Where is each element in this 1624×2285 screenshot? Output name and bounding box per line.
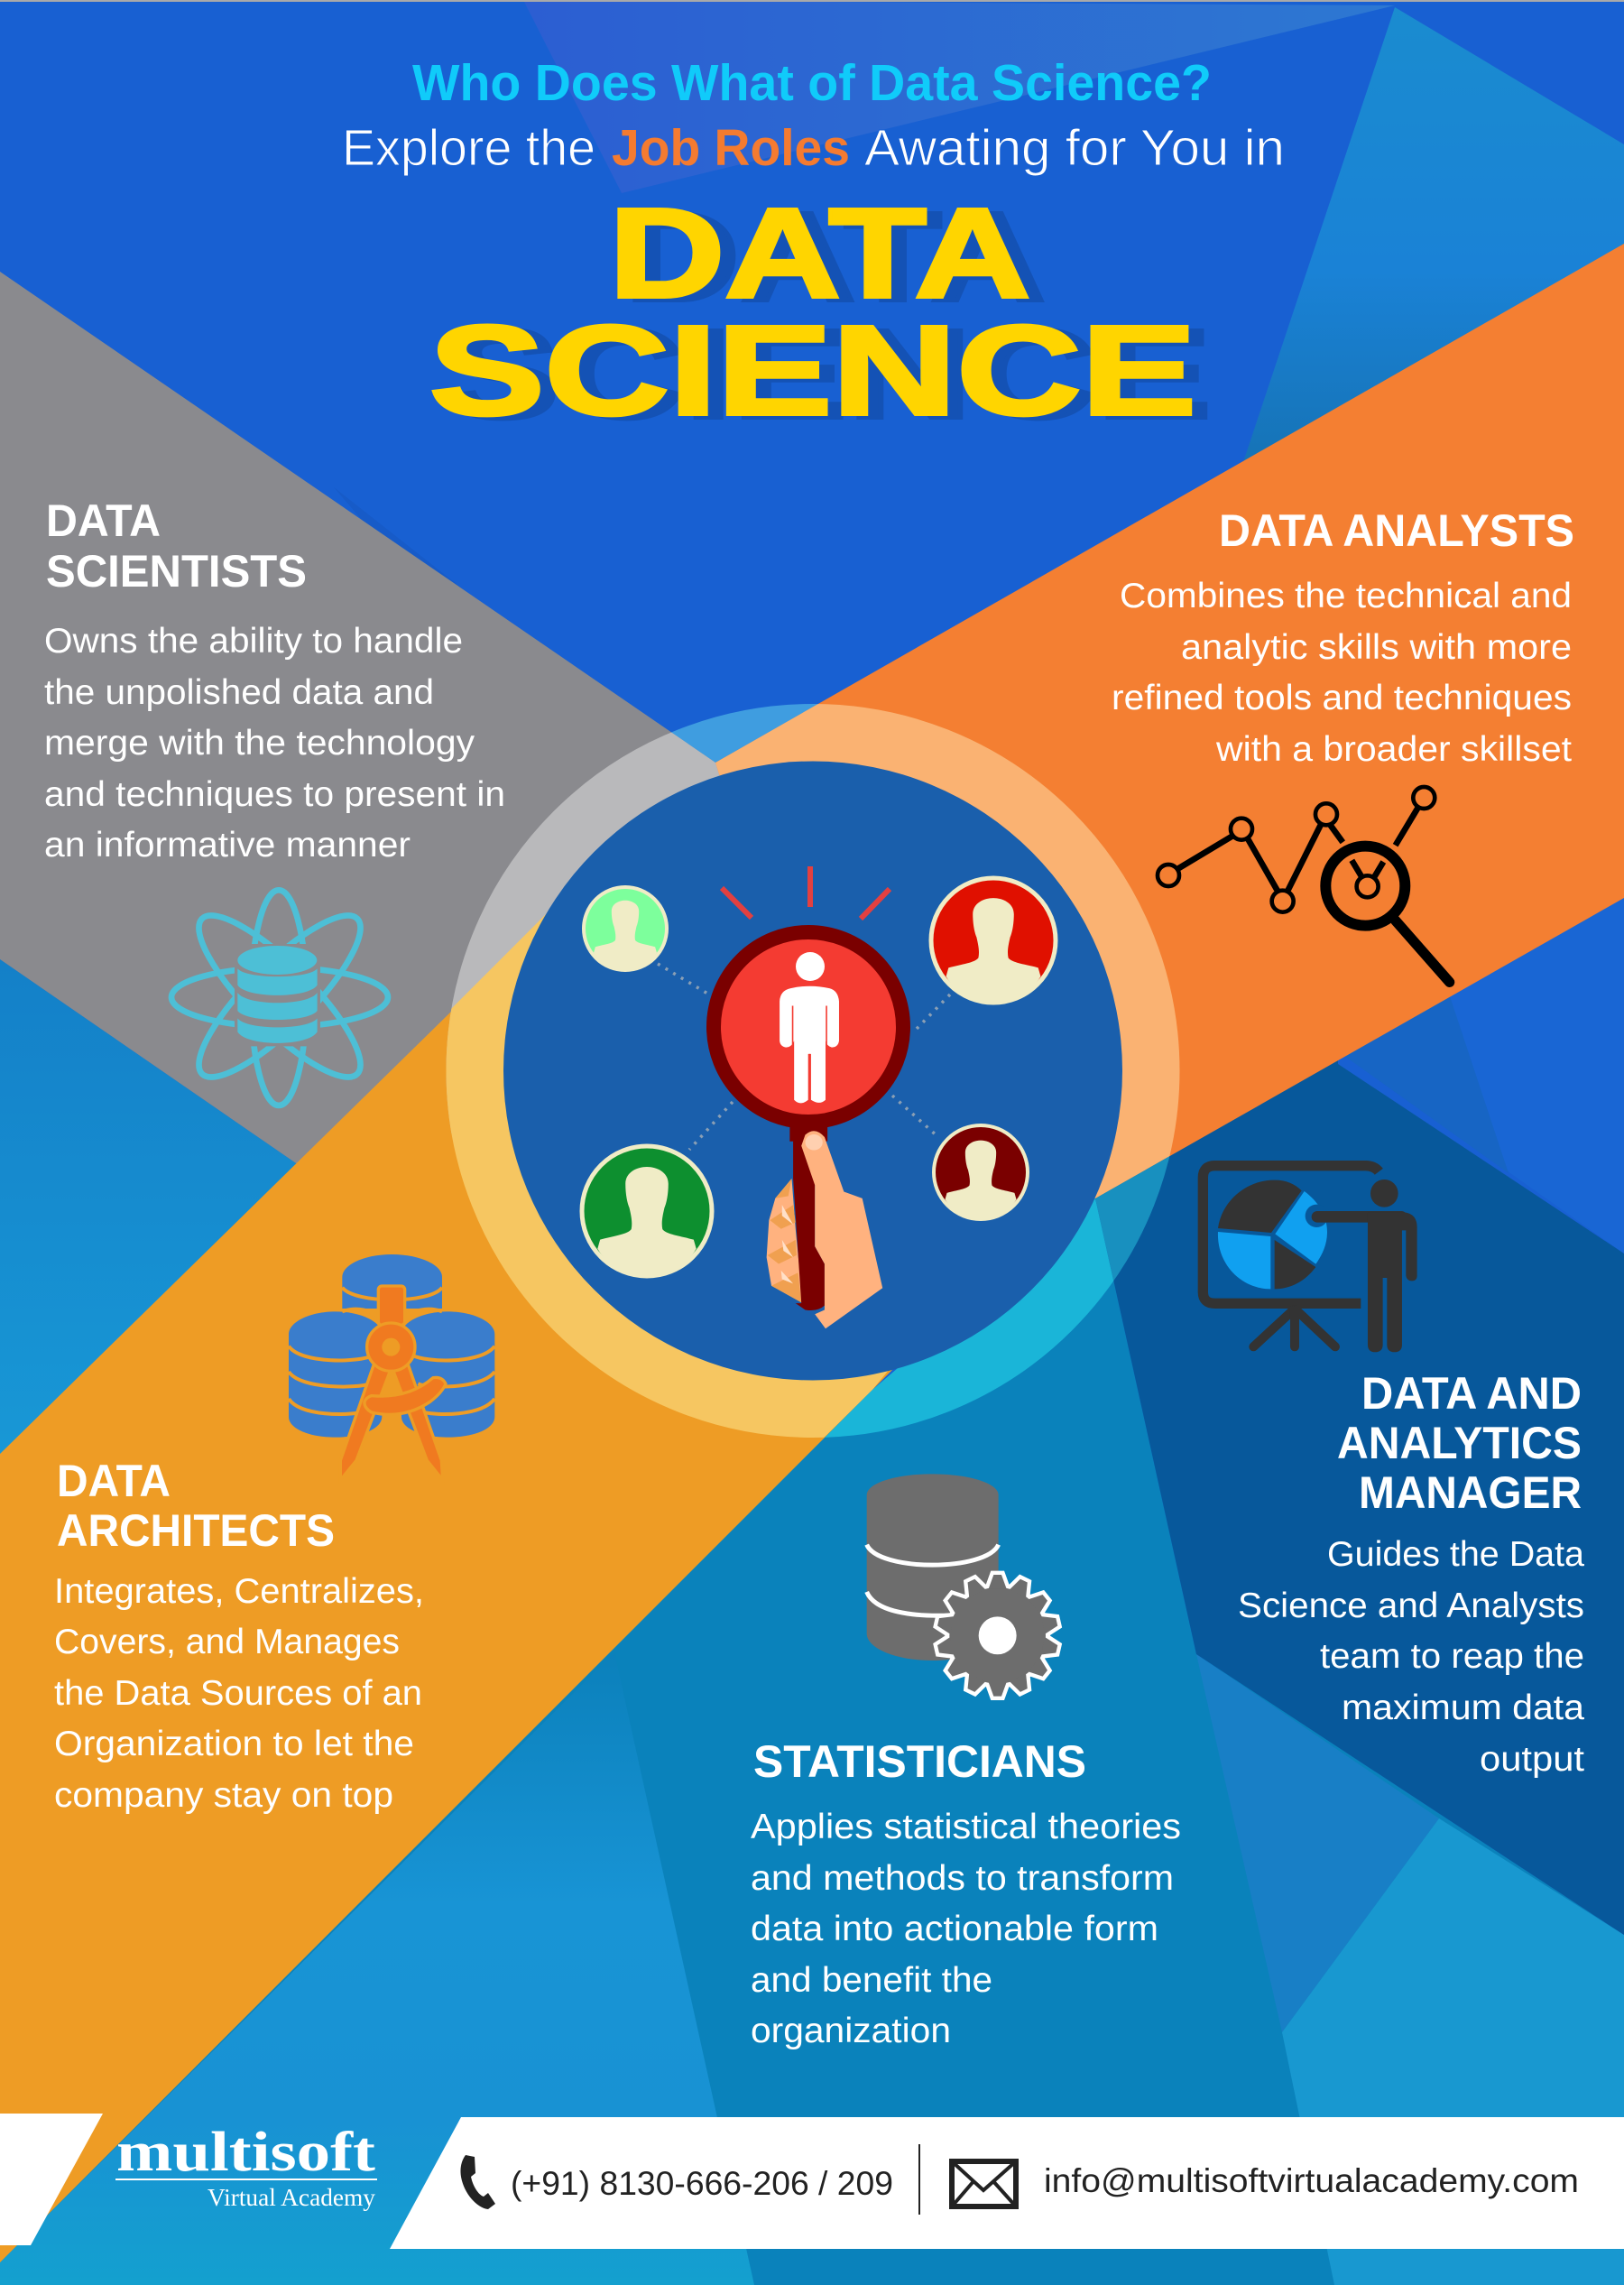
icon: atom with database: [171, 890, 388, 1105]
description: [44, 622, 505, 865]
central ring: [475, 733, 1151, 1409]
icon: white person: [780, 952, 839, 1103]
heading: DATA ANALYSTS: [1219, 505, 1574, 556]
heading: MANAGER: [1359, 1467, 1582, 1518]
description: maximum data: [1342, 1688, 1584, 1727]
panel: data architects background: [0, 835, 992, 2262]
icon: phone: [460, 2155, 495, 2209]
panel: data and analytics manager background: [1092, 1047, 1624, 1935]
text block: data scientists: [44, 495, 505, 865]
icon: green person: [582, 1146, 712, 1276]
heading: ARCHITECTS: [57, 1505, 335, 1556]
highlight rays: [722, 866, 890, 919]
description: data into actionable form: [751, 1910, 1158, 1948]
central illustration: magnifier over people: [582, 866, 1056, 1328]
description: [1112, 577, 1572, 769]
heading: [1337, 1368, 1582, 1518]
panel: data analysts background: [632, 244, 1624, 1198]
description: analytic skills with more: [1181, 628, 1572, 667]
description: the Data Sources of an: [54, 1674, 422, 1713]
main title: data science: DATA: [624, 185, 1046, 328]
text block: data analysts: [1112, 505, 1574, 769]
logo: multisoft virtual academy: [115, 2122, 377, 2211]
central circle: [503, 762, 1122, 1381]
description: an informative manner: [44, 826, 411, 865]
description: Applies statistical theories: [751, 1808, 1181, 1846]
description: [1238, 1535, 1584, 1779]
description: and techniques to present in: [44, 775, 505, 814]
email: info@multisoftvirtualacademy.com: [1044, 2162, 1579, 2199]
title block: [342, 54, 1285, 445]
logo: multisoft virtual academy: Virtual Academy: [208, 2184, 375, 2211]
dotted connectors: [658, 964, 950, 1150]
main title: data science: SCIENCE: [429, 299, 1196, 441]
magnifier handle and hand: [767, 1124, 882, 1328]
description: the unpolished data and: [44, 673, 434, 712]
heading: SCIENTISTS: [46, 546, 307, 597]
icon: databases with compass: [289, 1254, 494, 1480]
title line 2: Explore the: [342, 119, 595, 177]
description: [54, 1572, 424, 1815]
heading: [46, 495, 307, 597]
panel: data scientists background: [0, 272, 715, 1165]
description: and methods to transform: [751, 1859, 1174, 1898]
description: Covers, and Manages: [54, 1623, 400, 1661]
description: output: [1480, 1740, 1584, 1779]
description: company stay on top: [54, 1776, 393, 1815]
title line 1: Who Does What of Data Science?: [412, 54, 1212, 112]
icon: maroon person: [934, 1125, 1028, 1219]
heading: DATA: [46, 495, 161, 546]
white corner shape: [0, 2114, 103, 2245]
description: merge with the technology: [44, 724, 475, 763]
main title: data science: [429, 181, 1212, 445]
icon: database with gear: [867, 1474, 1059, 1697]
description: team to reap the: [1320, 1637, 1584, 1676]
heading: DATA AND: [1361, 1368, 1582, 1419]
description: Organization to let the: [54, 1725, 414, 1763]
text block: data and analytics manager: [1238, 1368, 1584, 1779]
main title: data science: DATA: [609, 181, 1030, 324]
description: Science and Analysts: [1238, 1587, 1584, 1625]
title line 2: Job Roles: [612, 119, 850, 177]
title line 2: [342, 119, 1285, 177]
icon: presenter with pie chart: [1203, 1166, 1417, 1352]
description: Guides the Data: [1327, 1535, 1584, 1574]
description: [751, 1808, 1181, 2050]
description: Combines the technical and: [1120, 577, 1572, 615]
text block: statisticians: [751, 1736, 1181, 2050]
heading: STATISTICIANS: [753, 1736, 1086, 1787]
text block: data architects: [54, 1456, 424, 1815]
description: Integrates, Centralizes,: [54, 1572, 424, 1611]
magnifier lens: [714, 932, 903, 1122]
description: Owns the ability to handle: [44, 622, 463, 661]
icon: envelope: [952, 2161, 1016, 2206]
heading: DATA: [57, 1456, 171, 1506]
heading: ANALYTICS: [1337, 1418, 1582, 1468]
logo: multisoft virtual academy: multisoft: [116, 2122, 375, 2183]
main title: data science: SCIENCE: [445, 302, 1212, 445]
icon: light green person: [584, 887, 667, 970]
footer: [0, 2114, 1624, 2249]
phone number: (+91) 8130-666-206 / 209: [511, 2165, 893, 2202]
contact bar: [390, 2117, 1624, 2249]
description: with a broader skillset: [1215, 730, 1572, 769]
icon: line chart with magnifier: [1158, 787, 1450, 982]
icon: red person: [931, 878, 1056, 1003]
title line 2: Awating for You in: [864, 119, 1285, 177]
heading: [57, 1456, 335, 1556]
description: and benefit the: [751, 1961, 992, 2000]
description: refined tools and techniques: [1112, 679, 1572, 717]
description: organization: [751, 2012, 951, 2050]
